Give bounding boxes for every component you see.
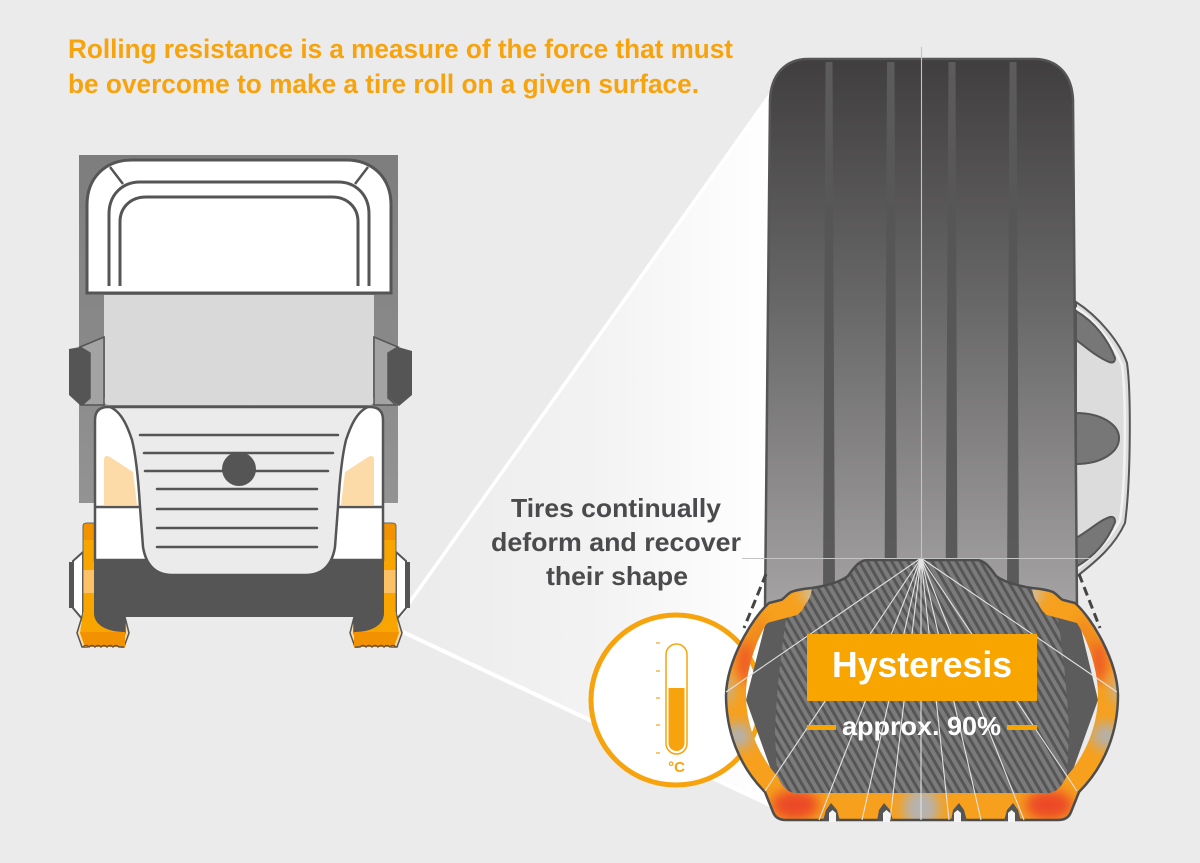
- approx. 90% label: approx. 90%: [842, 711, 1001, 741]
- windshield: [104, 295, 374, 405]
- thermometer callout: [591, 615, 761, 785]
- tire cross-section: [720, 558, 1125, 828]
- grille panel: [110, 407, 368, 575]
- hysteresis label box: Hysteresis: [832, 644, 1012, 685]
- callout text: deform and recover: [491, 527, 741, 557]
- grille slats: [140, 435, 338, 547]
- hatched inner area: [775, 560, 1069, 795]
- wheel hub side: [1076, 302, 1130, 577]
- inner cavity: [746, 560, 1098, 795]
- lower cab body: [95, 407, 383, 560]
- headlights: [104, 456, 374, 505]
- bumper: [94, 560, 384, 632]
- tire tread: [765, 59, 1077, 610]
- callout text: Tires continually: [511, 493, 722, 523]
- cargo box behind cab: [79, 155, 398, 503]
- left mirror: [69, 337, 104, 406]
- heated rubber ring: [727, 589, 1117, 819]
- light cone from truck tire to enlarged tire: [400, 92, 772, 806]
- section outline: [726, 560, 1118, 820]
- right wheel: [350, 523, 410, 647]
- thermometer callout: °C: [668, 759, 685, 776]
- hysteresis label box: [807, 634, 1037, 701]
- right mirror: [374, 337, 412, 406]
- deformation dashed lines: [744, 574, 1100, 628]
- tread lugs: [823, 803, 1021, 822]
- badge: [222, 452, 256, 486]
- callout text: [491, 493, 741, 591]
- left wheel: [69, 523, 129, 647]
- title text: Rolling resistance is a measure of the force that must: [68, 34, 733, 64]
- center axis lines: [742, 47, 1090, 558]
- force fan lines: [726, 558, 1117, 820]
- title text: [68, 34, 733, 99]
- truck front view: [69, 155, 412, 647]
- title text: be overcome to make a tire roll on a given surface.: [68, 69, 699, 99]
- cab roof and visor: [87, 160, 391, 293]
- approx. 90% label: [807, 711, 1037, 741]
- callout text: their shape: [546, 561, 688, 591]
